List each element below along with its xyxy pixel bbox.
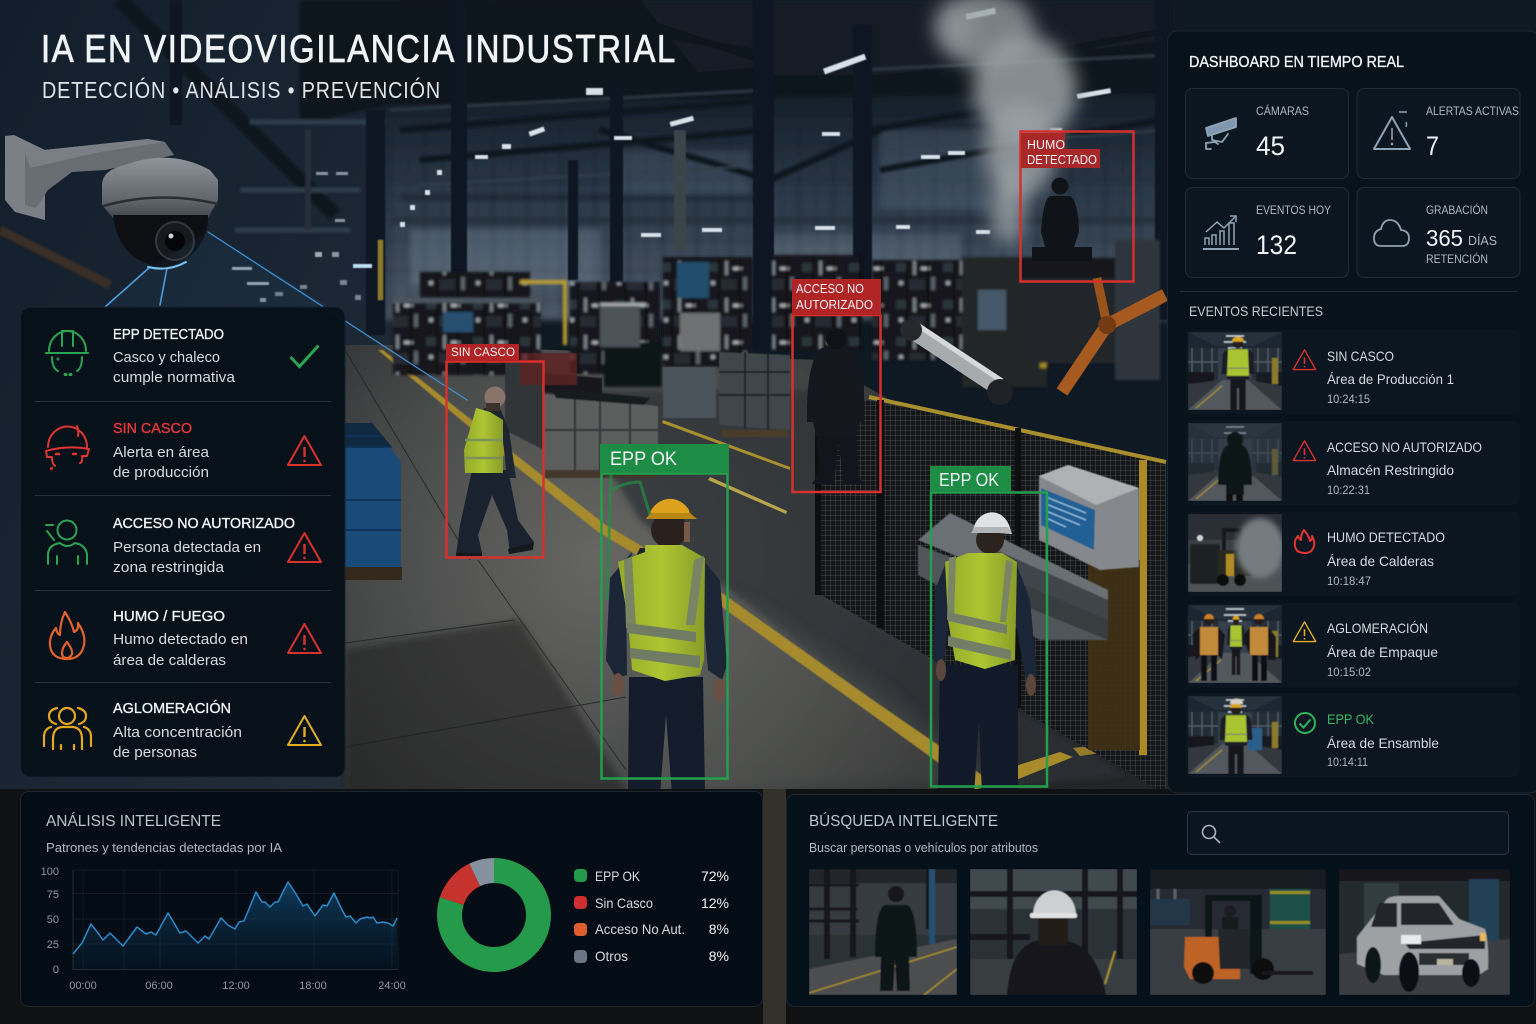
control console with monitor xyxy=(918,465,1139,640)
stat: grabacion xyxy=(1357,188,1520,278)
event: epp ok xyxy=(1186,693,1520,778)
donut legend: Acceso No Aut. xyxy=(595,921,685,937)
back wall with windows xyxy=(385,95,1170,320)
stat: grabacion: RETENCIÓN xyxy=(1426,251,1488,266)
camera detection beam xyxy=(105,232,467,400)
donut legend xyxy=(574,868,729,964)
blue storage bin xyxy=(345,423,402,580)
donut legend: 72% xyxy=(701,868,729,884)
worker: dark clothes, unauthorized xyxy=(807,329,866,484)
event: acceso no autorizado: ACCESO NO AUTORIZADO xyxy=(1327,439,1482,455)
thumbnail: white helmet xyxy=(970,869,1137,995)
stat: eventos hoy xyxy=(1186,188,1348,278)
event: epp ok: Área de Ensamble xyxy=(1327,735,1439,751)
floor xyxy=(345,345,1170,800)
item: humo fuego: HUMO / FUEGO xyxy=(113,608,225,625)
donut legend: Otros xyxy=(595,948,628,964)
subheading: busqueda: Buscar personas o vehículos por atributos xyxy=(809,841,1038,855)
detection box: EPP OK worker B: EPP OK xyxy=(939,469,1000,490)
event: acceso no autorizado: Almacén Restringido xyxy=(1327,462,1454,478)
donut legend: Sin Casco xyxy=(595,895,653,911)
item: sin casco: de producción xyxy=(113,464,209,481)
yellow floor lines xyxy=(378,350,992,790)
heading: busqueda: BÚSQUEDA INTELIGENTE xyxy=(809,811,998,830)
event: epp ok: EPP OK xyxy=(1327,711,1375,727)
stat: camaras: 45 xyxy=(1256,131,1285,161)
detection box: sin casco xyxy=(446,344,544,558)
line chart: 24:00 xyxy=(378,980,406,992)
worker walking without helmet xyxy=(456,386,534,556)
bottom shadow strip xyxy=(0,789,1536,1024)
event: acceso no autorizado xyxy=(1186,421,1520,505)
thumbnail: pickup truck xyxy=(1339,870,1510,995)
event: humo detectado: Área de Calderas xyxy=(1327,553,1434,569)
event: aglomeracion: 10:15:02 xyxy=(1327,665,1371,679)
line chart: 25 xyxy=(47,939,59,951)
item: EPP detectado: EPP DETECTADO xyxy=(113,326,224,343)
line chart: 50 xyxy=(47,914,59,926)
donut legend: 8% xyxy=(709,921,729,937)
ceiling trusses xyxy=(0,0,1170,285)
left wall xyxy=(0,0,400,800)
heading: eventos recientes: EVENTOS RECIENTES xyxy=(1189,303,1323,319)
stat: eventos hoy: 132 xyxy=(1256,230,1297,260)
thumbnail: forklift xyxy=(1150,870,1326,995)
title: IA EN VIDEOVIGILANCIA INDUSTRIAL xyxy=(41,28,677,71)
line chart: 12:00 xyxy=(222,980,250,992)
stat: alertas activas xyxy=(1357,88,1520,178)
stat: camaras: CÁMARAS xyxy=(1256,103,1309,118)
stat: grabacion: 365 xyxy=(1426,225,1463,251)
subtitle: DETECCIÓN • ANÁLISIS • PREVENCIÓN xyxy=(42,77,441,103)
security camera xyxy=(5,135,218,267)
item: sin casco: Alerta en área xyxy=(113,444,210,461)
panel: detection types xyxy=(20,307,345,777)
event: sin casco xyxy=(1186,330,1520,414)
panel: busqueda inteligente xyxy=(786,794,1534,1006)
item: EPP detectado xyxy=(46,326,318,386)
detection box: humo detectado xyxy=(1020,132,1134,282)
worker B: white helmet xyxy=(933,512,1037,795)
item: humo fuego: área de calderas xyxy=(113,652,226,669)
search box xyxy=(1188,812,1508,854)
detection box: acceso no autorizado: AUTORIZADO xyxy=(796,298,873,312)
event: humo detectado: 10:18:47 xyxy=(1327,574,1371,588)
stat: alertas activas: ALERTAS ACTIVAS xyxy=(1426,104,1519,118)
event: epp ok: 10:14:11 xyxy=(1327,755,1368,769)
donut chart xyxy=(450,870,538,960)
item: humo fuego xyxy=(50,608,321,669)
item: acceso no autorizado: Persona detectada en xyxy=(113,539,261,556)
item: EPP detectado: Casco y chaleco xyxy=(113,349,220,366)
worker A: yellow helmet xyxy=(606,473,727,795)
detection box: humo detectado: DETECTADO xyxy=(1027,153,1097,167)
item: acceso no autorizado: ACCESO NO AUTORIZADO xyxy=(113,515,295,532)
panel: analisis inteligente xyxy=(20,792,762,1006)
heading: analisis: ANÁLISIS INTELIGENTE xyxy=(46,811,221,830)
detection box: EPP OK worker A: EPP OK xyxy=(610,448,677,470)
item: acceso no autorizado xyxy=(46,515,321,576)
line chart: 75 xyxy=(47,889,59,901)
line chart: 0 xyxy=(53,964,59,976)
donut legend: 8% xyxy=(709,948,729,964)
smoke plume xyxy=(933,0,1077,245)
line chart: 06:00 xyxy=(145,980,173,992)
event: humo detectado xyxy=(1186,512,1520,596)
event: sin casco: Área de Producción 1 xyxy=(1327,371,1454,387)
event: aglomeracion: AGLOMERACIÓN xyxy=(1327,620,1428,636)
donut legend: 12% xyxy=(701,895,729,911)
detection box: acceso no autorizado xyxy=(792,279,881,492)
event: acceso no autorizado: 10:22:31 xyxy=(1327,483,1370,497)
item: EPP detectado: cumple normativa xyxy=(113,369,236,386)
detection box: acceso no autorizado: ACCESO NO xyxy=(796,282,864,296)
item: aglomeracion: AGLOMERACIÓN xyxy=(113,700,231,717)
metal crates xyxy=(505,352,790,478)
heading: dashboard: DASHBOARD EN TIEMPO REAL xyxy=(1189,54,1404,71)
line chart: 18:00 xyxy=(299,980,327,992)
columns xyxy=(170,0,1170,350)
detection box: sin casco: SIN CASCO xyxy=(451,345,515,359)
detection box: EPP OK worker A xyxy=(600,444,729,778)
stat: grabacion: DÍAS xyxy=(1468,233,1497,248)
stat: camaras xyxy=(1186,88,1348,178)
detection box: humo detectado: HUMO xyxy=(1027,138,1065,152)
stat: grabacion: GRABACIÓN xyxy=(1426,202,1488,217)
detection box: EPP OK worker B xyxy=(930,466,1047,786)
production machinery xyxy=(393,240,1160,387)
item: humo fuego: Humo detectado en xyxy=(113,631,248,648)
stat: eventos hoy: EVENTOS HOY xyxy=(1256,203,1331,217)
item: acceso no autorizado: zona restringida xyxy=(113,559,225,576)
item: sin casco xyxy=(46,420,321,481)
line chart xyxy=(41,866,406,992)
worker on platform near smoke xyxy=(1032,178,1092,261)
ceiling lights xyxy=(232,8,1111,302)
thumbnail: person xyxy=(809,869,957,995)
event: sin casco: SIN CASCO xyxy=(1327,348,1394,364)
donut legend: EPP OK xyxy=(595,868,641,884)
stat: alertas activas: 7 xyxy=(1426,131,1439,161)
item: sin casco: SIN CASCO xyxy=(113,420,192,437)
event: aglomeracion: Área de Empaque xyxy=(1327,644,1438,660)
white robot arm xyxy=(900,319,1013,405)
subheading: analisis: Patrones y tendencias detectadas por IA xyxy=(46,840,282,855)
event: sin casco: 10:24:15 xyxy=(1327,392,1370,406)
event: humo detectado: HUMO DETECTADO xyxy=(1327,529,1445,545)
safety fence xyxy=(815,390,1166,795)
line chart: 00:00 xyxy=(69,980,97,992)
item: aglomeracion: de personas xyxy=(113,744,197,761)
orange robot arm xyxy=(1062,278,1165,392)
panel: dashboard en tiempo real xyxy=(1168,31,1536,793)
event: aglomeracion xyxy=(1186,603,1520,687)
line chart: 100 xyxy=(41,866,59,878)
item: aglomeracion: Alta concentración xyxy=(113,724,242,741)
item: aglomeracion xyxy=(44,700,321,761)
